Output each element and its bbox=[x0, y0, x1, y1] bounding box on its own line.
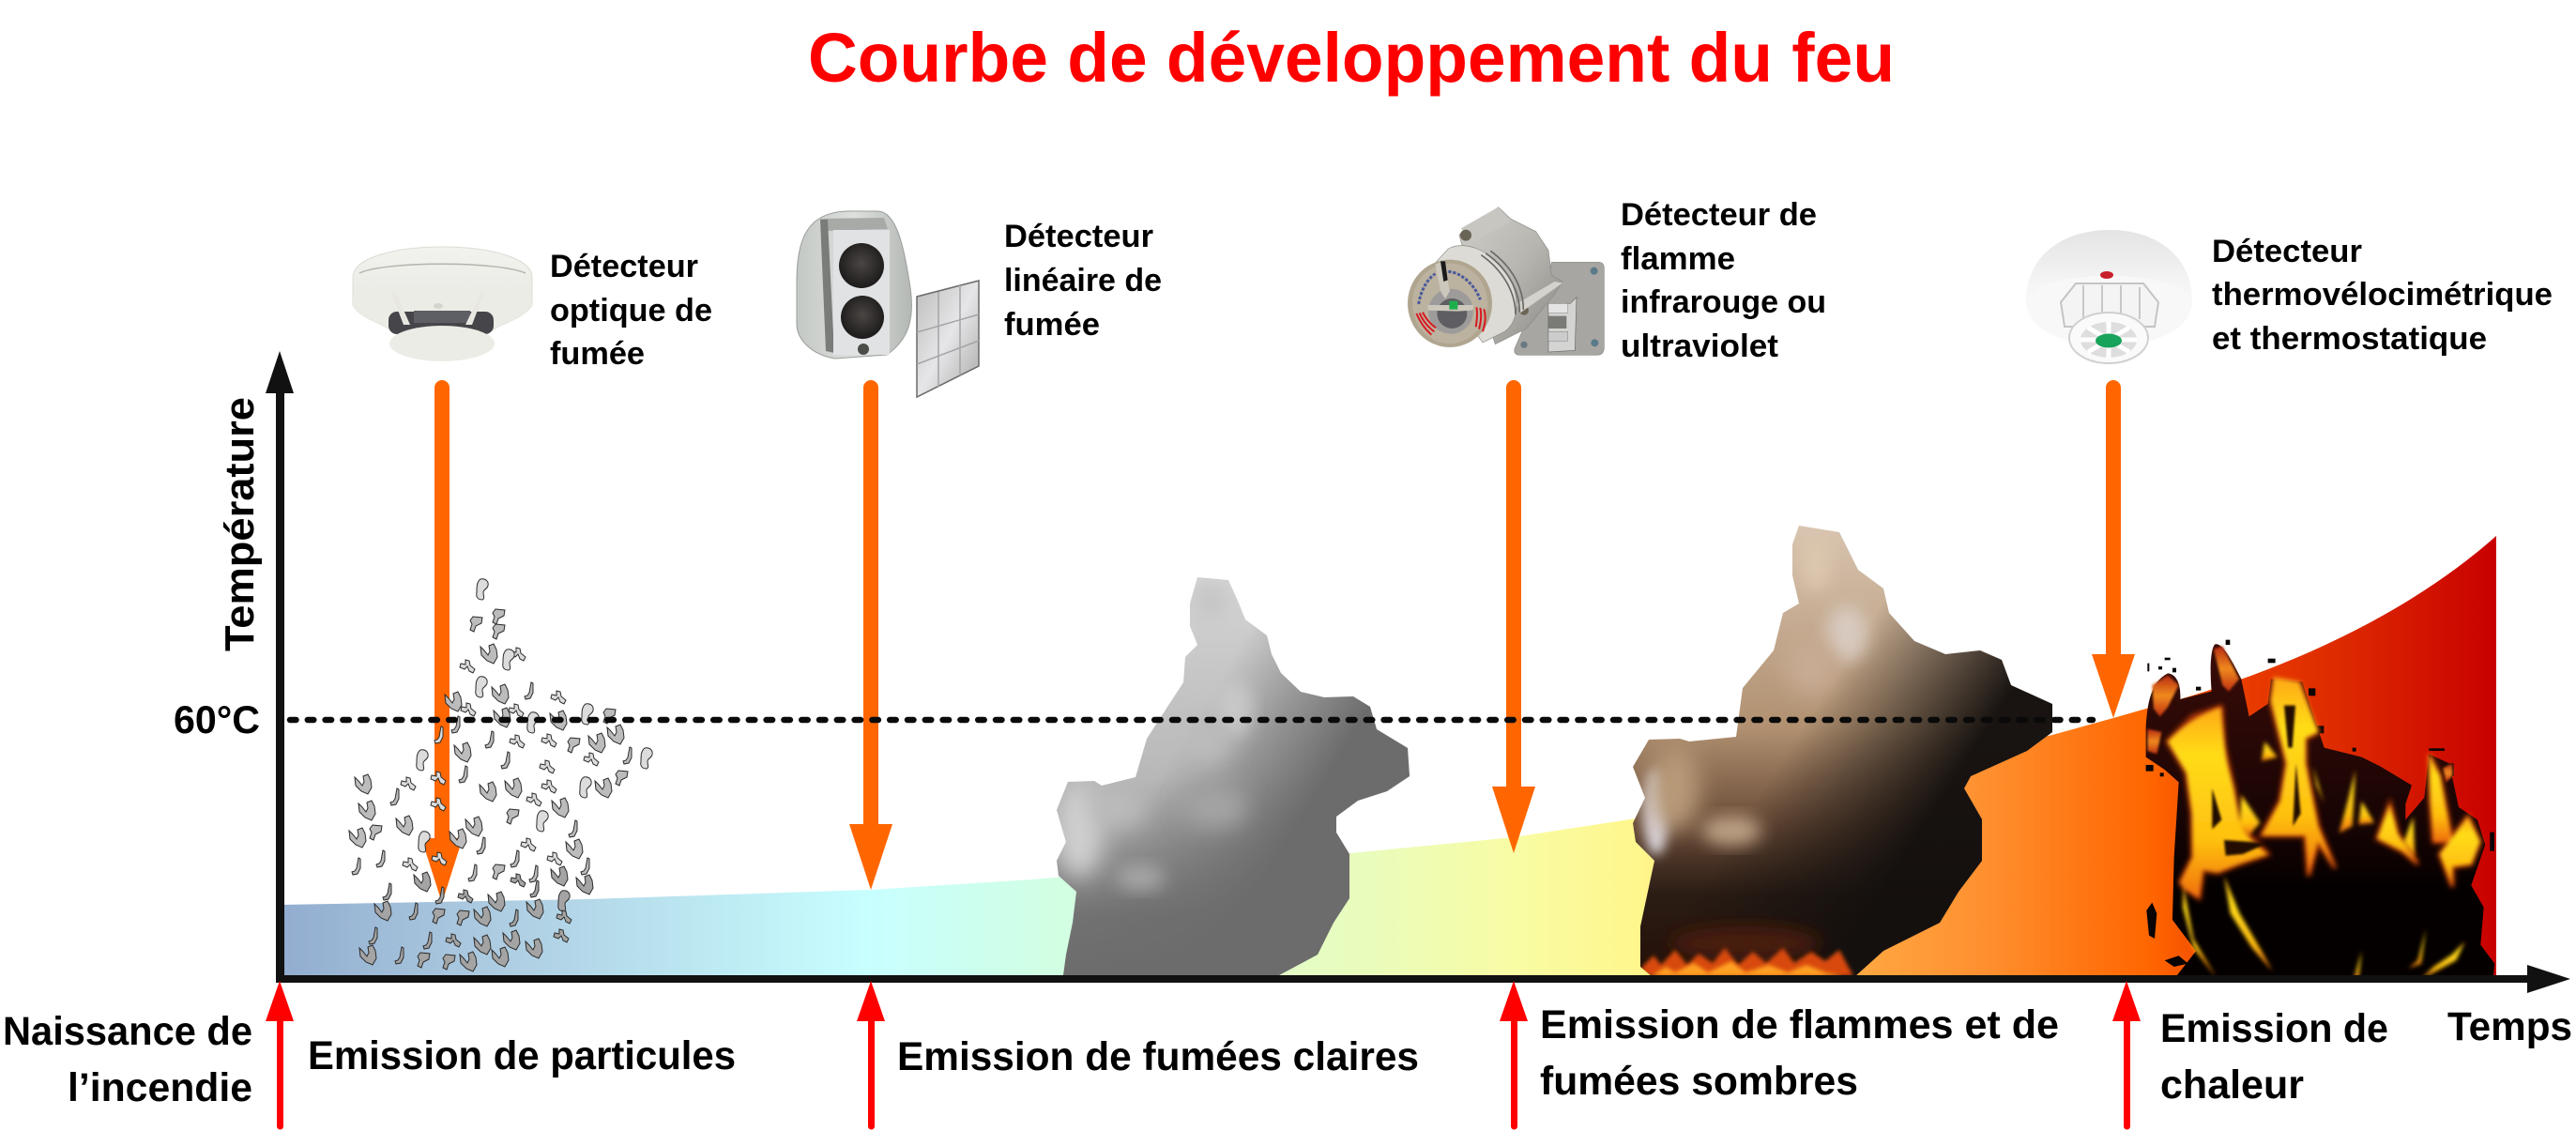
arrow: heat detector to heat bbox=[2092, 380, 2135, 718]
label: heat emission: Emission de bbox=[2160, 1006, 2388, 1051]
icon: rate-of-rise and fixed temperature heat detector bbox=[2026, 230, 2192, 363]
text: linear smoke detector label: linéaire de bbox=[1004, 263, 1162, 298]
text: heat detector label: Détecteur bbox=[2212, 234, 2362, 269]
threshold label: 60°C: 60°C bbox=[174, 697, 260, 741]
fire flames bbox=[2146, 640, 2494, 979]
arrow: flame detector to flames bbox=[1492, 380, 1535, 853]
label: light smoke emission: Emission de fumées claires bbox=[897, 1034, 1419, 1079]
red flame tips bbox=[2147, 646, 2452, 782]
black flame silhouette bbox=[2146, 644, 2494, 979]
mid-grey particles bbox=[349, 609, 632, 882]
icon: optical smoke detector bbox=[353, 247, 532, 361]
label: heat emission bbox=[2160, 1006, 2388, 1108]
text: flame detector label bbox=[1621, 197, 1826, 364]
text: flame detector label: infrarouge ou bbox=[1621, 284, 1826, 320]
light smoke cloud bbox=[1051, 573, 1417, 981]
text: linear smoke detector label bbox=[1004, 219, 1162, 343]
time axis arrow bbox=[276, 965, 2570, 993]
label: heat emission: chaleur bbox=[2160, 1062, 2304, 1108]
dark smoke cloud with flames bbox=[1628, 521, 2060, 981]
dark slits between flames bbox=[2212, 706, 2301, 856]
text: flame detector label: Détecteur de bbox=[1621, 197, 1817, 233]
text: linear smoke detector label: Détecteur bbox=[1004, 219, 1153, 254]
axis label: temperature: Température bbox=[217, 397, 263, 651]
axis label: time: Temps bbox=[2447, 1004, 2572, 1049]
text: flame detector label: ultraviolet bbox=[1621, 329, 1778, 364]
icon: infrared / ultraviolet flame detector bbox=[1408, 207, 1604, 355]
text: optical smoke detector label: Détecteur bbox=[550, 249, 698, 284]
label: flames and dark smoke emission bbox=[1540, 1002, 2059, 1104]
label: particle emission: Emission de particules bbox=[308, 1033, 736, 1078]
temperature axis arrow bbox=[266, 351, 294, 983]
dark particles bbox=[359, 866, 593, 971]
label: flames and dark smoke emission: Emission de flammes et de bbox=[1540, 1002, 2059, 1047]
red milestone arrows bbox=[266, 981, 2141, 1130]
text: optical smoke detector label: optique de bbox=[550, 293, 712, 329]
arrow: linear smoke detector to light smoke bbox=[849, 380, 892, 890]
60°C dotted threshold line bbox=[290, 717, 2093, 723]
text: linear smoke detector label: fumée bbox=[1004, 307, 1100, 343]
ember specks bbox=[2146, 640, 2494, 967]
text: heat detector label: et thermostatique bbox=[2212, 321, 2487, 357]
text: heat detector label bbox=[2212, 234, 2553, 357]
light particles bbox=[401, 579, 652, 871]
title: Courbe de développement du feu bbox=[808, 19, 1895, 97]
text: optical smoke detector label bbox=[550, 249, 712, 372]
yellow flame tongues bbox=[2168, 678, 2480, 979]
smoke particles bbox=[349, 579, 652, 971]
label: fire start bbox=[3, 1009, 252, 1110]
arrow: fire start bbox=[266, 981, 294, 1130]
icon: linear beam smoke detector bbox=[797, 211, 979, 397]
label: fire start: l’incendie bbox=[68, 1065, 252, 1110]
label: flames and dark smoke emission: fumées sombres bbox=[1540, 1059, 1858, 1104]
text: optical smoke detector label: fumée bbox=[550, 336, 645, 372]
orange detector arrows bbox=[421, 380, 2135, 903]
fire development curve area bbox=[282, 536, 2496, 977]
arrow: heat stage bbox=[2112, 981, 2141, 1130]
flame glow bbox=[2168, 678, 2480, 898]
arrow: optical smoke detector to particles bbox=[421, 380, 463, 903]
text: heat detector label: thermovélocimétrique bbox=[2212, 277, 2553, 313]
text: flame detector label: flamme bbox=[1621, 241, 1735, 277]
label: fire start: Naissance de bbox=[3, 1009, 252, 1054]
arrow: flames stage bbox=[1500, 981, 1528, 1130]
arrow: light smoke stage bbox=[857, 981, 885, 1130]
